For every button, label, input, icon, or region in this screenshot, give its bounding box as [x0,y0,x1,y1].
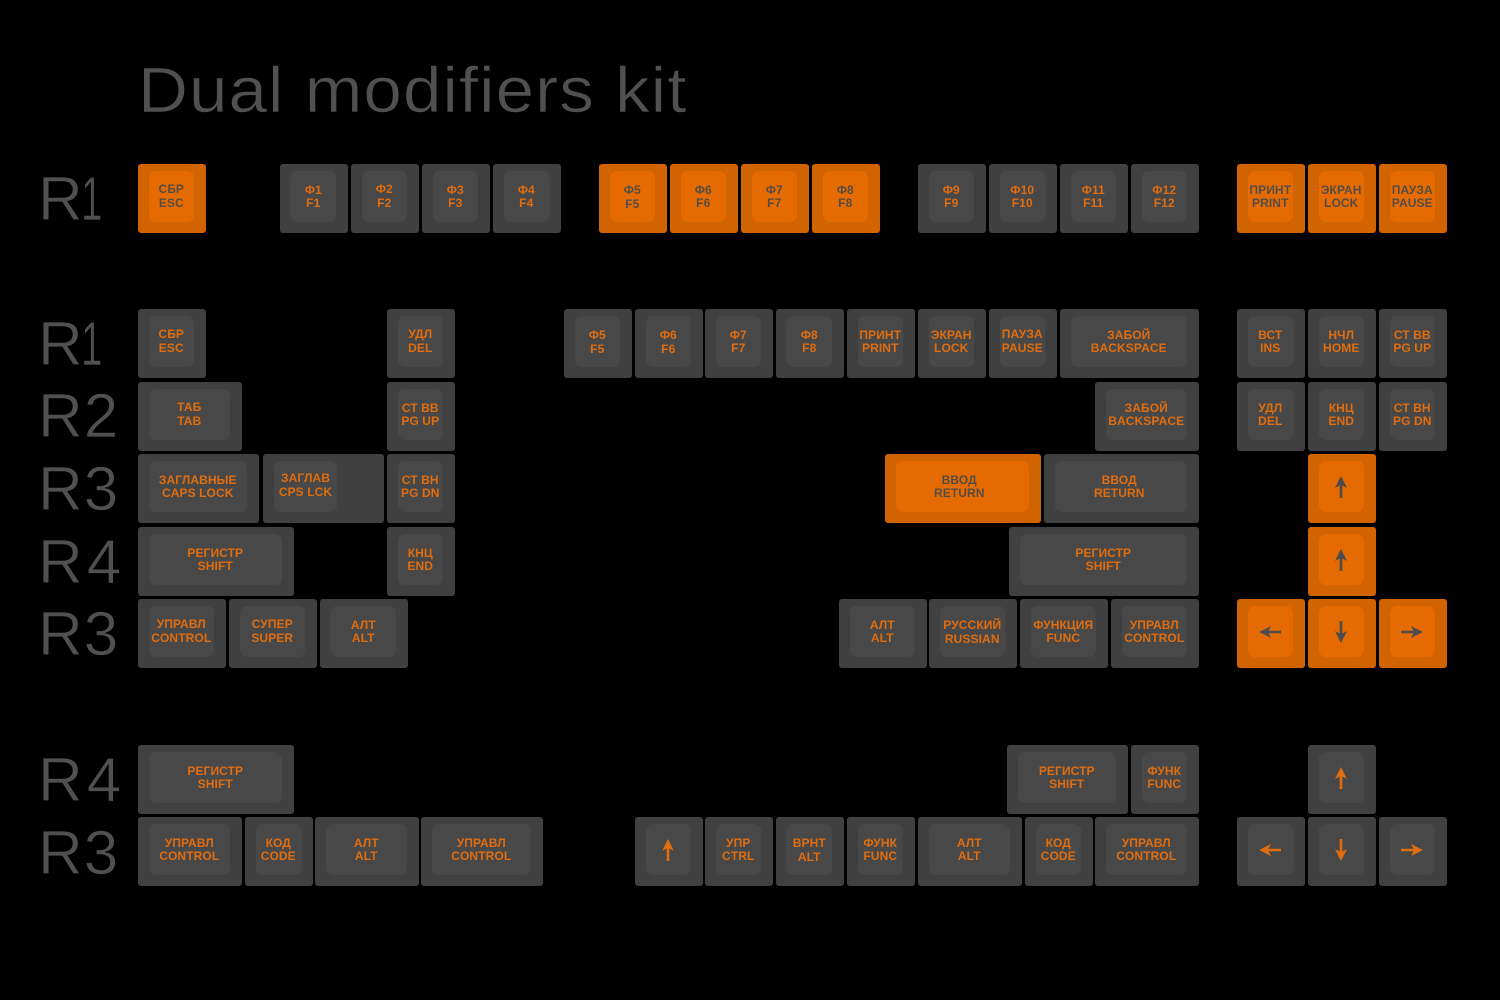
key: RUSSIAN [929,599,1017,668]
key: TAB: TAB [177,414,201,428]
key: DEL: DEL [1258,414,1282,428]
key: CONTROL: CONTROL [1116,849,1176,863]
key: F12: Ф12 [1152,182,1176,196]
row label: R1: R [38,310,84,379]
key: PG UP: СТ ВВ [1394,328,1431,342]
key: PG DN: СТ ВН [1394,400,1431,414]
key: LOCK: ЭКРАН [931,328,972,342]
key: ESC orange: СБР [158,182,184,196]
key: F6: F6 [661,342,675,356]
key: CTRL [705,817,773,886]
key: F3 [422,164,490,233]
row label: R2: R2 [38,382,119,451]
key: ALT: ALT [798,850,821,864]
key: FUNC: FUNC [1147,777,1181,791]
key: stepped CPS LCK: ЗАГЛАВ [281,471,330,485]
key: FUNC [1020,599,1108,668]
key: DEL: УДЛ [408,327,432,341]
row label: R1: R [38,165,84,234]
key: ESC orange [138,164,206,233]
key: F5 [564,309,632,378]
key: CAPS LOCK [138,454,259,523]
key: PG UP: PG UP [401,414,439,428]
key: PG UP [1379,309,1447,378]
key: RUSSIAN: RUSSIAN [945,632,1000,646]
key: ALT: АЛТ [957,836,982,850]
key: right arrow orange [1379,599,1447,668]
key: F7: Ф7 [730,328,747,342]
key: F7: F7 [731,341,745,355]
key: ALT: АЛТ [870,618,895,632]
key: CONTROL [421,817,543,886]
key: END: END [407,559,433,573]
key: CONTROL [138,817,242,886]
key: SHIFT: РЕГИСТР [187,546,243,560]
key: PAUSE: ПАУЗА [1002,327,1043,341]
key: F4: Ф4 [518,182,535,196]
key: PG DN: PG DN [401,486,440,500]
key: SHIFT: SHIFT [198,559,233,573]
key: ESC: ESC [159,340,184,354]
key: CONTROL: CONTROL [151,630,211,644]
key: F5 orange: F5 [625,196,639,210]
key: CODE [245,817,313,886]
key: PAUSE orange: ПАУЗА [1392,182,1433,196]
key: F8 [776,309,844,378]
key: DEL [1237,382,1305,451]
key: ALT: ALT [355,849,378,863]
key: PG DN: СТ ВН [402,472,439,486]
row label: R4: R4 [38,528,125,597]
key: SHIFT [138,745,294,814]
key: SUPER: SUPER [251,630,293,644]
key: ESC orange: ESC [159,196,184,210]
row label: R3: R3 [38,819,119,888]
key: CONTROL: CONTROL [159,849,219,863]
key: F2: Ф2 [376,182,393,196]
key: F5 orange [599,164,667,233]
key: F9 [918,164,986,233]
key: SHIFT: SHIFT [1086,559,1121,573]
key: BACKSPACE [1060,309,1199,378]
row label: R1: 1 [81,165,103,234]
key: F6: Ф6 [660,328,677,342]
key: SHIFT: РЕГИСТР [187,764,243,778]
key: CONTROL: УПРАВЛ [1122,836,1171,850]
key: F11: Ф11 [1082,182,1105,196]
key: F11 [1060,164,1128,233]
key: ALT: АЛТ [354,836,379,850]
key: CODE: CODE [1041,849,1076,863]
key: F7 orange: F7 [767,196,781,210]
key: F8 orange: F8 [838,196,852,210]
key: PG DN: PG DN [1393,414,1432,428]
key: F8 orange: Ф8 [837,182,854,196]
key: F5: F5 [590,342,604,356]
key: F2: F2 [377,196,391,210]
key: FUNC: ФУНКЦИЯ [1033,618,1093,632]
key: CODE: CODE [261,849,296,863]
key: down arrow orange [1308,599,1376,668]
key: BACKSPACE short [1095,382,1199,451]
key: HOME [1308,309,1376,378]
key: FUNC: ФУНК [1147,764,1181,778]
key: F7 orange: Ф7 [766,182,783,196]
key: F8 orange [812,164,880,233]
key: PAUSE: PAUSE [1002,340,1043,354]
key: ESC: СБР [158,327,184,341]
key: ALT: ALT [871,631,894,645]
key: CONTROL: УПРАВЛ [457,836,506,850]
key: left arrow orange [1237,599,1305,668]
key: PAUSE orange: PAUSE [1392,196,1433,210]
key: ALT [776,817,844,886]
key: SHIFT short: РЕГИСТР [1039,764,1095,778]
key: CONTROL [1111,599,1199,668]
key: stepped CPS LCK: CPS LCK [279,484,332,498]
key: RETURN orange: RETURN [934,486,985,500]
key: F12: F12 [1154,196,1175,210]
key: PRINT [847,309,915,378]
key: PRINT orange: ПРИНТ [1249,182,1291,196]
key: LOCK orange [1308,164,1376,233]
key: F4 [493,164,561,233]
key: F3: F3 [448,196,462,210]
key: CONTROL: УПРАВЛ [165,836,214,850]
key: END: END [1328,414,1354,428]
key: SHIFT [138,527,294,596]
key: FUNC [1131,745,1199,814]
key: TAB: ТАБ [177,400,201,414]
key: CONTROL: УПРАВЛ [157,617,206,631]
key: ESC [138,309,206,378]
key: PG UP [387,382,455,451]
key: BACKSPACE short: BACKSPACE [1108,414,1184,428]
key: LOCK: LOCK [934,341,968,355]
key: ALT: ALT [958,849,981,863]
row label: R4: R4 [38,746,125,815]
key: F3: Ф3 [447,182,464,196]
key: INS [1237,309,1305,378]
key: F10 [989,164,1057,233]
key: END: КНЦ [408,546,433,560]
key: F10: Ф10 [1010,182,1034,196]
key: PRINT orange [1237,164,1305,233]
key: F8: F8 [802,341,816,355]
key: CONTROL: CONTROL [451,849,511,863]
key: CONTROL [138,599,226,668]
key: LOCK orange: LOCK [1324,196,1358,210]
key: HOME: НЧЛ [1328,328,1354,342]
key: right arrow [1379,817,1447,886]
key: ALT: ALT [352,631,375,645]
key: CAPS LOCK: CAPS LOCK [162,486,234,500]
key: PAUSE [989,309,1057,378]
key: F9: F9 [944,196,958,210]
key: PRINT: ПРИНТ [859,328,901,342]
key: F6 orange: Ф6 [695,182,712,196]
key: down arrow [1308,817,1376,886]
key: SHIFT short [1007,745,1128,814]
key: F6 [635,309,703,378]
key: ALT [839,599,927,668]
key: PRINT orange: PRINT [1252,196,1288,210]
key: RETURN orange: ВВОД [942,472,977,486]
key: F1: Ф1 [305,182,322,196]
row label: R1: 1 [81,310,103,379]
key: RUSSIAN: РУССКИЙ [943,618,1001,632]
key: SUPER: СУПЕР [252,617,293,631]
key: PG DN [387,454,455,523]
key: TAB [138,382,242,451]
key: RETURN [1044,454,1199,523]
key: CODE: КОД [266,836,291,850]
key: RETURN orange [885,454,1041,523]
key: RETURN: ВВОД [1102,472,1137,486]
key: F4: F4 [519,196,533,210]
key: FUNC: FUNC [863,849,897,863]
key: HOME: HOME [1323,341,1359,355]
key: F5 orange: Ф5 [624,183,641,197]
key: SHIFT: РЕГИСТР [1075,546,1131,560]
key: BACKSPACE: BACKSPACE [1091,341,1167,355]
key: CAPS LOCK: ЗАГЛАВНЫЕ [159,472,237,486]
key: F1 [280,164,348,233]
key: F8: Ф8 [801,328,818,342]
key: BACKSPACE: ЗАБОЙ [1107,328,1150,342]
key: SHIFT short: SHIFT [1049,777,1084,791]
key: SUPER [229,599,317,668]
key: left arrow [1237,817,1305,886]
key: CONTROL: CONTROL [1124,631,1184,645]
key: stepped CPS LCK [263,454,384,523]
key: DEL [387,309,455,378]
key: F6 orange [670,164,738,233]
key: FUNC [847,817,915,886]
key: PG UP: PG UP [1393,341,1431,355]
row label: R3: R3 [38,600,119,669]
key: INS: ВСТ [1258,328,1282,342]
key: F10: F10 [1012,196,1033,210]
key: DEL: DEL [408,340,432,354]
key: up arrow [635,817,703,886]
key: CODE: КОД [1046,836,1071,850]
key: F7 [705,309,773,378]
key: PRINT: PRINT [862,341,898,355]
key: CTRL: CTRL [722,849,754,863]
key: CONTROL [1095,817,1199,886]
key: SHIFT [1009,527,1199,596]
key: ALT [320,599,408,668]
key: F11: F11 [1083,196,1103,210]
key: F6 orange: F6 [696,196,710,210]
title: Dual modifiers kit [138,54,688,126]
key: ALT [315,817,419,886]
key: SHIFT: SHIFT [198,777,233,791]
key: DEL: УДЛ [1258,400,1282,414]
key: LOCK [918,309,986,378]
key: RETURN: RETURN [1094,486,1145,500]
key: PAUSE orange [1379,164,1447,233]
key: END [387,527,455,596]
key: F1: F1 [306,196,320,210]
key: END [1308,382,1376,451]
key: BACKSPACE short: ЗАБОЙ [1125,400,1168,414]
key: CODE [1025,817,1093,886]
key: F5: Ф5 [589,328,606,342]
key: FUNC: FUNC [1046,631,1080,645]
key: CTRL: УПР [726,836,750,850]
row label: R3: R3 [38,455,119,524]
key: up arrow orange [1308,527,1376,596]
key: LOCK orange: ЭКРАН [1321,182,1362,196]
key: F2 [351,164,419,233]
key: PG DN [1379,382,1447,451]
key: F12 [1131,164,1199,233]
key: up arrow [1308,745,1376,814]
key: FUNC: ФУНК [863,836,897,850]
key: END: КНЦ [1329,400,1354,414]
key: F9: Ф9 [943,182,960,196]
key: ALT: АЛТ [351,618,376,632]
key: INS: INS [1260,341,1280,355]
key: up arrow orange [1308,454,1376,523]
key: CONTROL: УПРАВЛ [1130,618,1179,632]
key: ALT: ВРНТ [793,836,826,850]
key: PG UP: СТ ВВ [402,400,439,414]
key: F7 orange [741,164,809,233]
key: ALT [918,817,1022,886]
